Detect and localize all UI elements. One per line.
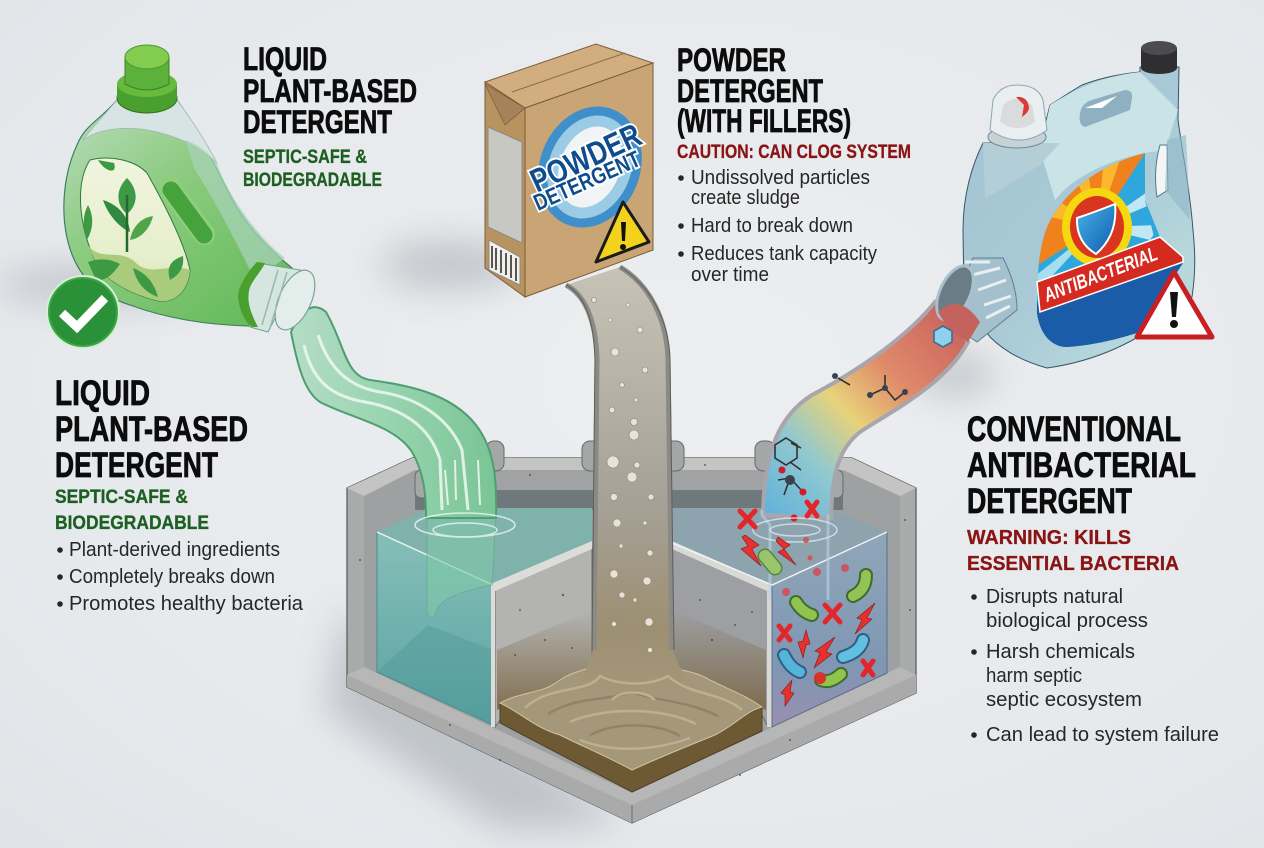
lower left text block: DETERGENT (55, 446, 218, 485)
conventional antibacterial text block: biological process (986, 610, 1148, 632)
right chamber water back (672, 508, 887, 585)
septic tank (347, 441, 916, 823)
emblem (1062, 188, 1132, 266)
antibacterial stream (753, 302, 968, 600)
conventional antibacterial text block: ESSENTIAL BACTERIA (967, 553, 1179, 575)
powder detergent text block: Undissolved particles (691, 167, 870, 189)
top left heading: liquid plant-based (243, 41, 417, 191)
powder detergent text block: Reduces tank capacity (691, 243, 877, 265)
sludge swirls (525, 676, 742, 749)
bacteria and damage symbols (740, 502, 875, 706)
powder stream (525, 267, 742, 749)
powder detergent text block: over time (691, 264, 769, 286)
green bottle (47, 45, 323, 348)
logo text: POWDER (524, 116, 647, 199)
tank rim (347, 458, 916, 496)
antibacterial jug (929, 41, 1212, 368)
conventional antibacterial text block: harm septic (986, 665, 1082, 687)
check badge (47, 276, 119, 348)
conventional antibacterial text block: Disrupts natural (986, 586, 1123, 608)
left water chamber (377, 508, 592, 725)
powder box (485, 44, 660, 297)
molecule icons (775, 326, 952, 495)
particles (592, 298, 654, 652)
conventional antibacterial text block (967, 410, 1219, 746)
debris (782, 537, 849, 596)
powder detergent text block: POWDER (677, 42, 786, 78)
label: ANTIBACTERIAL (1040, 243, 1161, 307)
top left heading: liquid plant-based: BIODEGRADABLE (243, 170, 382, 191)
warning triangle (1137, 272, 1212, 337)
sludge pile (500, 662, 762, 792)
warning sign (596, 202, 649, 262)
lower left text block: SEPTIC-SAFE & (55, 487, 188, 508)
lower left text block: Promotes healthy bacteria (69, 593, 304, 615)
green liquid stream (291, 307, 515, 618)
black cap (1141, 41, 1177, 74)
powder detergent text block: DETERGENT (677, 73, 823, 109)
logo text (524, 116, 647, 216)
powder detergent text block: Hard to break down (691, 215, 853, 237)
lower left text block (55, 374, 304, 615)
conventional antibacterial text block: WARNING: KILLS (967, 527, 1131, 549)
pale liquid strip (185, 140, 285, 280)
bacteria (765, 556, 866, 681)
top left heading: liquid plant-based: PLANT-BASED (243, 73, 417, 109)
clear dispenser cap (988, 85, 1047, 148)
conventional antibacterial text block: Can lead to system failure (986, 724, 1219, 746)
conventional antibacterial text block: Harsh chemicals (986, 641, 1135, 663)
red band (1037, 237, 1183, 312)
lower left text block: LIQUID (55, 374, 150, 413)
cap (117, 45, 177, 113)
top left heading: liquid plant-based: SEPTIC-SAFE & (243, 147, 367, 168)
conventional antibacterial text block: CONVENTIONAL (967, 410, 1181, 449)
lower left text block: PLANT-BASED (55, 410, 248, 449)
box front (525, 63, 653, 297)
powder detergent text block: CAUTION: CAN CLOG SYSTEM (677, 142, 911, 163)
jug body (963, 67, 1195, 368)
logo text: DETERGENT (529, 145, 644, 216)
air section (83, 100, 217, 163)
concrete speckles (359, 464, 911, 776)
red crosses (740, 502, 873, 675)
top left heading: liquid plant-based: DETERGENT (243, 104, 392, 140)
lightning bolts (741, 535, 875, 706)
right divider wall (672, 548, 768, 727)
right water chamber (672, 532, 887, 727)
dirt staining (497, 610, 592, 710)
conventional antibacterial text block: ANTIBACTERIAL (967, 446, 1196, 485)
lower left text block: Completely breaks down (69, 566, 275, 588)
powder detergent text block: (WITH FILLERS) (677, 103, 851, 139)
pipe stubs (415, 441, 843, 498)
neck ring and thread (238, 262, 323, 336)
handle (170, 188, 204, 235)
label (1030, 145, 1183, 347)
box top (485, 44, 653, 108)
soft shadows (0, 241, 995, 830)
conventional antibacterial text block: DETERGENT (967, 482, 1132, 521)
conventional antibacterial text block: septic ecosystem (986, 689, 1142, 711)
tank outer shell (347, 458, 916, 823)
lower left text block: Plant-derived ingredients (69, 539, 280, 561)
top left heading: liquid plant-based: LIQUID (243, 41, 327, 77)
tank interior (364, 470, 900, 793)
jug spout (929, 258, 1017, 342)
box side (485, 82, 525, 297)
left divider wall (495, 548, 592, 727)
powder detergent text block: create sludge (691, 187, 800, 209)
bottle body (64, 100, 292, 326)
lower left text block: BIODEGRADABLE (55, 513, 209, 534)
side panel label (488, 127, 522, 243)
powder detergent text block (677, 42, 911, 286)
handle opening (1080, 90, 1132, 127)
logo circle (520, 91, 660, 243)
plant label (80, 158, 190, 301)
